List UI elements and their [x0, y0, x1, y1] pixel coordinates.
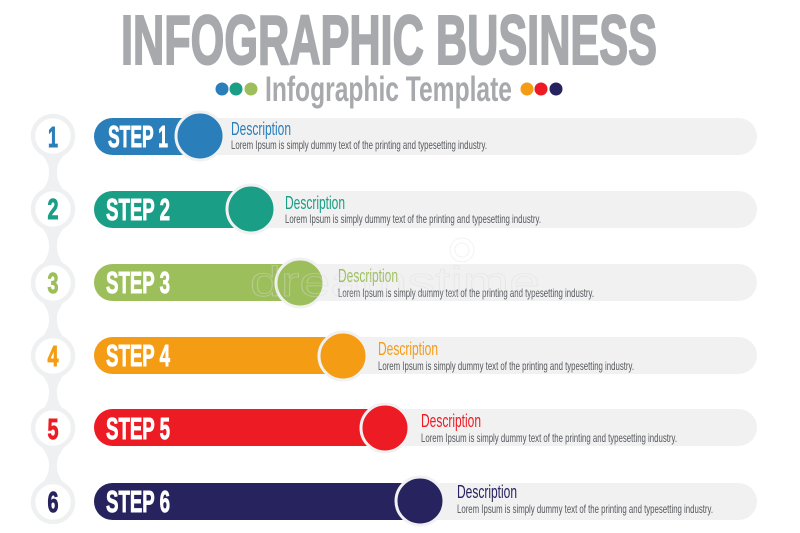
subtitle: Infographic Template	[265, 70, 512, 109]
watermark	[250, 238, 540, 305]
step 5 row: STEP 5	[106, 411, 170, 446]
step 4 row	[94, 332, 757, 380]
step 5 row: Description	[421, 410, 481, 431]
number chain: 5	[48, 414, 58, 446]
step 4 row: Lorem Ipsum is simply dummy text of the printing and typesetting industry.	[378, 359, 634, 373]
step 1 row: Lorem Ipsum is simply dummy text of the printing and typesetting industry.	[231, 138, 487, 152]
step 3 row	[94, 259, 757, 307]
step 6 row	[94, 477, 757, 525]
right dots	[520, 82, 562, 96]
step 6 row: STEP 6	[106, 484, 170, 519]
number chain: 4	[48, 341, 58, 373]
step 4 row: STEP 4	[106, 338, 170, 373]
step 4 row: Description	[378, 338, 438, 359]
step 3 row: Lorem Ipsum is simply dummy text of the printing and typesetting industry.	[338, 286, 594, 300]
step 2 row: Description	[285, 192, 345, 213]
number chain	[33, 116, 73, 522]
step 3 row: Description	[338, 265, 398, 286]
number chain: 2	[48, 194, 58, 226]
step 5 row	[94, 404, 757, 452]
step 3 row: STEP 3	[106, 265, 170, 300]
number chain: 1	[48, 122, 58, 154]
step 1 row: Description	[231, 118, 291, 139]
step 1 row	[94, 112, 757, 160]
step 2 row	[94, 185, 757, 233]
step 2 row: STEP 2	[106, 192, 170, 227]
left dots	[216, 82, 258, 96]
step 6 row: Description	[457, 481, 517, 502]
number chain: 6	[48, 487, 58, 519]
number chain: 3	[48, 268, 58, 300]
step 2 row: Lorem Ipsum is simply dummy text of the printing and typesetting industry.	[285, 212, 541, 226]
step 1 row: STEP 1	[108, 119, 168, 154]
watermark: dreamstime	[250, 258, 540, 305]
